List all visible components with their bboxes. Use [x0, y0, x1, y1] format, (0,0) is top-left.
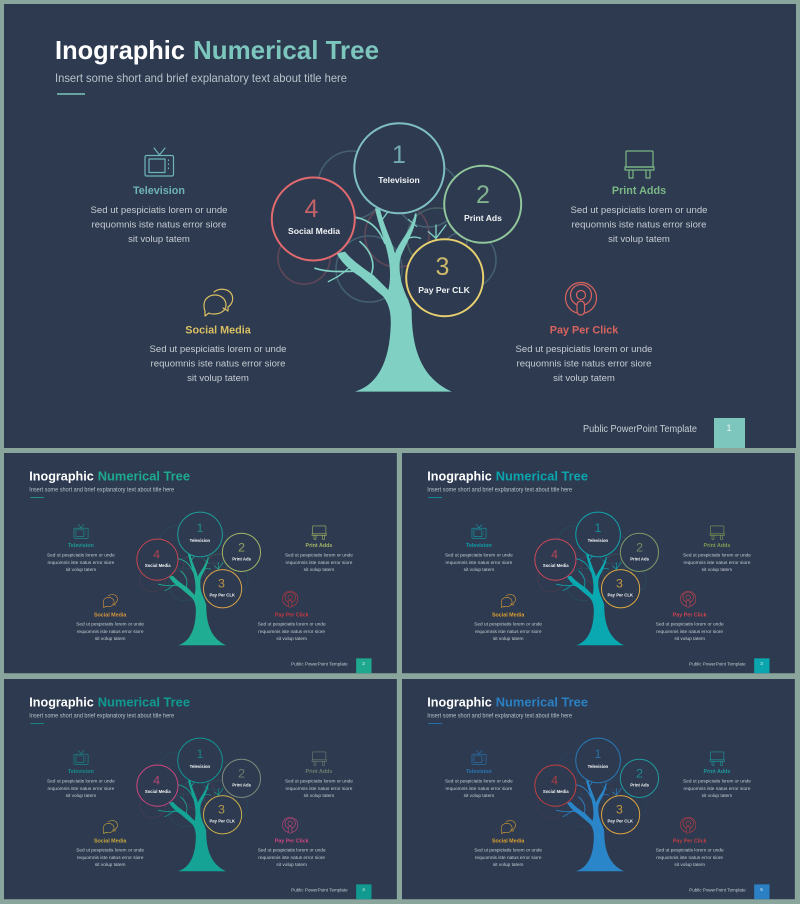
- node 1: [354, 123, 444, 213]
- item: social media: [474, 595, 542, 642]
- item: social media: requomnis iste natus error siore: [475, 855, 542, 861]
- node 3: 3: [218, 576, 225, 590]
- item: print adds: sit volup tatem: [304, 567, 334, 573]
- item: television: requomnis iste natus error siore: [47, 560, 115, 566]
- item: print adds: [570, 151, 708, 245]
- item: television: Sed ut pespiciatis lorem or unde: [90, 205, 228, 216]
- node 4: [272, 178, 355, 260]
- title: Inographic: [29, 468, 94, 483]
- subtitle: Insert some short and brief explanatory text about title here: [427, 488, 573, 494]
- item: social media: [149, 289, 287, 384]
- item: print adds: Sed ut pespiciatis lorem or unde: [285, 779, 353, 785]
- item: social media: Sed ut pespiciatis lorem or unde: [474, 622, 542, 628]
- item: pay per click: Pay Per Click: [275, 612, 309, 618]
- node 3: Pay Per CLK: [209, 818, 236, 823]
- tree diagram: [535, 512, 659, 645]
- node 3: Pay Per CLK: [607, 818, 634, 823]
- footer: [291, 884, 372, 899]
- footer: [689, 658, 770, 673]
- node 1: [178, 738, 222, 783]
- item: pay per click: [258, 591, 326, 642]
- node 4: Social Media: [288, 226, 340, 236]
- node 4: Social Media: [543, 789, 569, 794]
- item: television: Sed ut pespiciatis lorem or unde: [445, 553, 513, 559]
- item: television: [90, 148, 228, 245]
- item: print adds: requomnis iste natus error siore: [286, 560, 353, 566]
- node 2: Print Ads: [630, 783, 650, 788]
- item: social media: Social Media: [492, 612, 524, 618]
- item: pay per click: Sed ut pespiciatis lorem or unde: [656, 848, 724, 854]
- node 4: 4: [551, 548, 558, 562]
- item: pay per click: requomnis iste natus error siore: [258, 855, 325, 861]
- item: print adds: [285, 526, 353, 573]
- node 3: 3: [616, 576, 623, 590]
- footer: Public PowerPoint Template: [689, 661, 746, 667]
- tree diagram: [272, 123, 521, 392]
- item: print adds: sit volup tatem: [702, 567, 732, 573]
- item: television: [445, 524, 513, 573]
- node 3: [203, 570, 242, 608]
- title: Numerical Tree: [98, 694, 190, 709]
- item: social media: [76, 595, 144, 642]
- footer: [291, 658, 372, 673]
- item: television: requomnis iste natus error siore: [92, 220, 226, 230]
- item: television: sit volup tatem: [128, 234, 190, 245]
- item: print adds: Sed ut pespiciatis lorem or unde: [683, 779, 751, 785]
- node 4: 4: [153, 548, 160, 562]
- item: social media: sit volup tatem: [187, 373, 249, 384]
- subtitle: Insert some short and brief explanatory text about title here: [29, 714, 175, 720]
- item: print adds: Sed ut pespiciatis lorem or unde: [285, 553, 353, 559]
- item: print adds: sit volup tatem: [304, 793, 334, 799]
- node 4: Social Media: [145, 563, 171, 568]
- slide 3: cyan: [402, 453, 795, 673]
- item: pay per click: sit volup tatem: [674, 636, 705, 642]
- slide 2: green: [4, 453, 397, 673]
- node 2: 2: [636, 767, 643, 781]
- item: pay per click: Pay Per Click: [673, 612, 707, 618]
- item: social media: sit volup tatem: [95, 862, 125, 868]
- item: social media: Sed ut pespiciatis lorem or unde: [474, 848, 542, 854]
- item: television: sit volup tatem: [464, 793, 494, 799]
- item: television: Television: [466, 543, 492, 549]
- tree diagram: [137, 512, 261, 645]
- node 2: Print Ads: [232, 557, 252, 562]
- title: Inographic: [427, 468, 492, 483]
- node 3: [601, 570, 640, 608]
- item: television: Television: [68, 543, 94, 549]
- node 2: 2: [476, 181, 490, 209]
- node 3: [601, 796, 640, 834]
- node 3: Pay Per CLK: [209, 592, 236, 597]
- node 1: 1: [196, 521, 203, 535]
- node 4: [137, 539, 178, 580]
- title: [427, 694, 588, 709]
- item: television: Television: [466, 769, 492, 775]
- item: social media: Social Media: [94, 612, 126, 618]
- item: television: Sed ut pespiciatis lorem or unde: [47, 553, 115, 559]
- node 2: 2: [238, 541, 245, 555]
- footer: [689, 884, 770, 899]
- slide 1: main teal: [4, 4, 796, 448]
- item: pay per click: Sed ut pespiciatis lorem or unde: [515, 344, 653, 355]
- item: pay per click: Pay Per Click: [275, 838, 309, 844]
- item: social media: sit volup tatem: [493, 862, 523, 868]
- node 4: Social Media: [145, 789, 171, 794]
- item: print adds: requomnis iste natus error siore: [286, 786, 353, 792]
- node 1: Television: [588, 764, 609, 769]
- node 4: 4: [153, 774, 160, 788]
- tree diagram: [535, 738, 659, 871]
- item: print adds: Print Adds: [612, 185, 666, 197]
- subtitle: Insert some short and brief explanatory text about title here: [55, 71, 347, 85]
- item: print adds: requomnis iste natus error siore: [684, 560, 751, 566]
- node 2: Print Ads: [630, 557, 650, 562]
- title: [427, 468, 588, 483]
- item: pay per click: Sed ut pespiciatis lorem or unde: [656, 622, 724, 628]
- item: pay per click: [656, 591, 724, 642]
- node 4: [535, 539, 576, 580]
- node 1: Television: [190, 538, 211, 543]
- node 1: 1: [392, 141, 406, 169]
- item: television: [47, 750, 115, 799]
- item: print adds: Print Adds: [704, 769, 730, 775]
- item: television: requomnis iste natus error siore: [445, 560, 513, 566]
- item: social media: Social Media: [94, 838, 126, 844]
- item: television: requomnis iste natus error siore: [445, 786, 513, 792]
- item: social media: Sed ut pespiciatis lorem or unde: [149, 344, 287, 355]
- footer: 3: [760, 661, 763, 666]
- item: television: requomnis iste natus error siore: [47, 786, 115, 792]
- node 1: [576, 738, 620, 783]
- title: Inographic: [427, 694, 492, 709]
- item: pay per click: Sed ut pespiciatis lorem or unde: [258, 848, 326, 854]
- title: Numerical Tree: [98, 468, 190, 483]
- item: pay per click: Sed ut pespiciatis lorem or unde: [258, 622, 326, 628]
- node 4: [137, 765, 178, 806]
- item: television: Sed ut pespiciatis lorem or unde: [445, 779, 513, 785]
- tree diagram: [137, 738, 261, 871]
- item: television: [445, 750, 513, 799]
- subtitle: Insert some short and brief explanatory text about title here: [29, 488, 175, 494]
- node 4: [535, 765, 576, 806]
- node 3: Pay Per CLK: [418, 285, 471, 295]
- node 2: [444, 166, 521, 243]
- item: social media: requomnis iste natus error siore: [151, 358, 285, 370]
- item: pay per click: requomnis iste natus error siore: [258, 629, 325, 635]
- footer: 5: [760, 887, 763, 892]
- item: pay per click: Pay Per Click: [673, 838, 707, 844]
- item: social media: requomnis iste natus error siore: [77, 855, 144, 861]
- node 2: [620, 533, 659, 571]
- node 2: 2: [636, 541, 643, 555]
- item: television: sit volup tatem: [464, 567, 494, 573]
- slide 4: teal: [4, 679, 397, 899]
- item: print adds: [285, 752, 353, 799]
- title: [55, 35, 379, 65]
- node 2: [620, 759, 659, 797]
- item: print adds: Print Adds: [306, 543, 332, 549]
- footer: 2: [362, 661, 365, 666]
- item: social media: sit volup tatem: [493, 636, 523, 642]
- item: print adds: requomnis iste natus error siore: [684, 786, 751, 792]
- node 3: 3: [616, 802, 623, 816]
- item: print adds: Sed ut pespiciatis lorem or unde: [683, 553, 751, 559]
- node 4: Social Media: [543, 563, 569, 568]
- node 2: 2: [238, 767, 245, 781]
- title: Inographic: [29, 694, 94, 709]
- node 1: 1: [594, 747, 601, 761]
- node 1: 1: [594, 521, 601, 535]
- item: pay per click: sit volup tatem: [674, 862, 705, 868]
- item: television: Sed ut pespiciatis lorem or unde: [47, 779, 115, 785]
- node 4: 4: [551, 774, 558, 788]
- footer: Public PowerPoint Template: [689, 887, 746, 893]
- item: television: sit volup tatem: [66, 793, 96, 799]
- item: print adds: Print Adds: [704, 543, 730, 549]
- node 1: 1: [196, 747, 203, 761]
- slide 5: blue: [402, 679, 795, 899]
- item: pay per click: sit volup tatem: [276, 862, 307, 868]
- footer: Public PowerPoint Template: [583, 424, 697, 435]
- item: pay per click: [258, 817, 326, 868]
- node 2: [222, 533, 261, 571]
- item: pay per click: sit volup tatem: [276, 636, 307, 642]
- node 1: Television: [588, 538, 609, 543]
- item: social media: requomnis iste natus error siore: [475, 629, 542, 635]
- footer: Public PowerPoint Template: [291, 887, 348, 893]
- item: social media: Social Media: [185, 324, 252, 336]
- item: pay per click: requomnis iste natus error siore: [656, 629, 723, 635]
- node 2: Print Ads: [464, 213, 502, 223]
- node 3: [203, 796, 242, 834]
- item: social media: sit volup tatem: [95, 636, 125, 642]
- item: television: [47, 524, 115, 573]
- item: pay per click: requomnis iste natus error siore: [656, 855, 723, 861]
- title: Inographic: [55, 35, 185, 65]
- item: television: sit volup tatem: [66, 567, 96, 573]
- item: print adds: [683, 526, 751, 573]
- item: television: Television: [133, 185, 185, 197]
- item: print adds: Sed ut pespiciatis lorem or unde: [570, 205, 708, 216]
- item: social media: [76, 821, 144, 868]
- footer: [583, 418, 745, 448]
- item: print adds: Print Adds: [306, 769, 332, 775]
- item: pay per click: [656, 817, 724, 868]
- subtitle: Insert some short and brief explanatory text about title here: [427, 714, 573, 720]
- node 2: Print Ads: [232, 783, 252, 788]
- item: pay per click: requomnis iste natus error siore: [517, 358, 651, 370]
- footer: 4: [362, 887, 365, 892]
- item: social media: Social Media: [492, 838, 524, 844]
- node 3: [406, 239, 483, 316]
- node 1: [178, 512, 222, 557]
- node 3: 3: [436, 253, 449, 281]
- node 4: 4: [305, 195, 319, 223]
- item: print adds: sit volup tatem: [702, 793, 732, 799]
- node 3: 3: [218, 802, 225, 816]
- node 2: [222, 759, 261, 797]
- item: pay per click: sit volup tatem: [553, 373, 615, 384]
- title: Numerical Tree: [496, 468, 588, 483]
- item: social media: requomnis iste natus error siore: [77, 629, 144, 635]
- item: social media: Sed ut pespiciatis lorem or unde: [76, 622, 144, 628]
- item: print adds: requomnis iste natus error siore: [572, 220, 706, 230]
- item: print adds: sit volup tatem: [608, 234, 670, 245]
- node 1: Television: [190, 764, 211, 769]
- item: pay per click: Pay Per Click: [550, 324, 619, 336]
- item: print adds: [683, 752, 751, 799]
- title: [29, 694, 190, 709]
- item: pay per click: [515, 282, 653, 384]
- item: social media: Sed ut pespiciatis lorem or unde: [76, 848, 144, 854]
- title: [29, 468, 190, 483]
- node 1: Television: [378, 175, 420, 185]
- item: social media: [474, 821, 542, 868]
- node 1: [576, 512, 620, 557]
- title: Numerical Tree: [193, 35, 379, 65]
- node 3: Pay Per CLK: [607, 592, 634, 597]
- item: television: Television: [68, 769, 94, 775]
- footer: Public PowerPoint Template: [291, 661, 348, 667]
- title: Numerical Tree: [496, 694, 588, 709]
- footer: 1: [726, 423, 732, 434]
